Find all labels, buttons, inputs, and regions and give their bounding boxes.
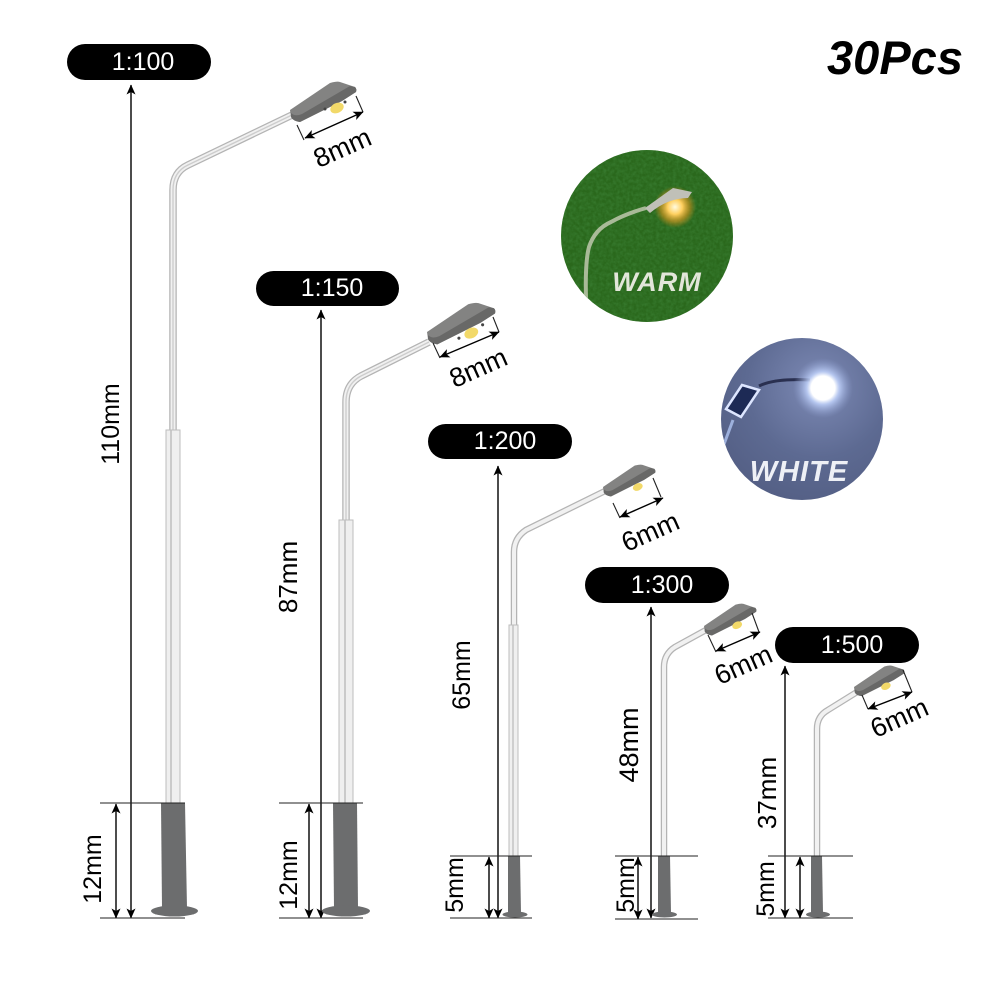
scale pill bbox=[67, 44, 211, 80]
base dimension: 5mm bbox=[612, 857, 640, 913]
base bbox=[322, 803, 370, 916]
lamp head bbox=[290, 82, 356, 122]
lamp 1:150 bbox=[256, 271, 512, 918]
photo: white light sample bbox=[721, 338, 883, 500]
width dimension: 6mm bbox=[710, 639, 777, 691]
height label: 48mm bbox=[614, 707, 644, 783]
base bbox=[806, 856, 830, 918]
white lamp wire bbox=[759, 380, 810, 386]
base dimension: 5mm bbox=[752, 861, 780, 917]
width dimension: 8mm bbox=[445, 342, 512, 394]
warm lamp pole bbox=[586, 208, 646, 298]
scale pill: 1:150 bbox=[301, 274, 363, 302]
height arrow bbox=[650, 607, 652, 918]
scale pill: 1:100 bbox=[112, 48, 174, 76]
scale pill: 1:300 bbox=[631, 571, 693, 599]
lamp head bbox=[427, 303, 495, 344]
lamp 1:300 bbox=[585, 567, 777, 919]
white lamp head bbox=[726, 385, 759, 417]
lamp 1:500 bbox=[752, 627, 933, 918]
base dimension: 12mm bbox=[275, 840, 303, 910]
scale pill bbox=[428, 424, 572, 459]
scale pill: 1:200 bbox=[474, 427, 536, 455]
height arrow bbox=[497, 466, 499, 918]
width dimension bbox=[433, 317, 512, 394]
width dimension bbox=[297, 96, 376, 174]
warm label: WARM bbox=[612, 267, 702, 297]
height arrow bbox=[130, 85, 132, 918]
lamp head bbox=[854, 665, 904, 696]
width dimension bbox=[613, 478, 684, 558]
pole bbox=[664, 630, 706, 856]
scale pill bbox=[585, 567, 729, 603]
scale pill bbox=[256, 271, 399, 306]
width dimension: 6mm bbox=[866, 692, 933, 744]
base dimension bbox=[79, 803, 185, 918]
height arrow bbox=[320, 310, 322, 918]
white label: WHITE bbox=[750, 456, 849, 488]
scale pill: 1:500 bbox=[821, 631, 883, 659]
height label: 37mm bbox=[752, 757, 782, 829]
height label: 87mm bbox=[273, 541, 303, 613]
height label: 110mm bbox=[97, 383, 125, 465]
pole bbox=[817, 692, 857, 856]
base dimension bbox=[752, 856, 853, 918]
height label: 65mm bbox=[448, 640, 476, 710]
lamp 1:100 bbox=[67, 44, 376, 918]
scale pill bbox=[775, 627, 919, 663]
base bbox=[151, 803, 198, 916]
width dimension bbox=[862, 670, 933, 744]
base dimension bbox=[275, 803, 363, 918]
photo: warm light sample bbox=[561, 150, 733, 322]
lamp 1:200 bbox=[428, 424, 684, 918]
base dimension: 5mm bbox=[441, 857, 469, 913]
warm lamp head bbox=[645, 188, 692, 213]
width dimension: 6mm bbox=[617, 506, 684, 558]
width dimension bbox=[708, 613, 777, 691]
base bbox=[502, 856, 528, 918]
base dimension bbox=[441, 856, 532, 918]
width dimension: 8mm bbox=[309, 122, 376, 174]
height arrow bbox=[784, 666, 786, 918]
base bbox=[652, 856, 677, 918]
title: 30Pcs: 30Pcs bbox=[827, 31, 963, 84]
pole bbox=[166, 115, 292, 803]
warm glow bbox=[654, 186, 696, 228]
pole bbox=[509, 491, 605, 856]
pole bbox=[339, 342, 429, 803]
lamp head bbox=[704, 604, 756, 635]
white lamp stem bbox=[723, 420, 733, 447]
base dimension bbox=[612, 856, 698, 919]
white glow bbox=[793, 358, 853, 418]
lamp head bbox=[603, 465, 655, 496]
base dimension: 12mm bbox=[79, 834, 107, 904]
